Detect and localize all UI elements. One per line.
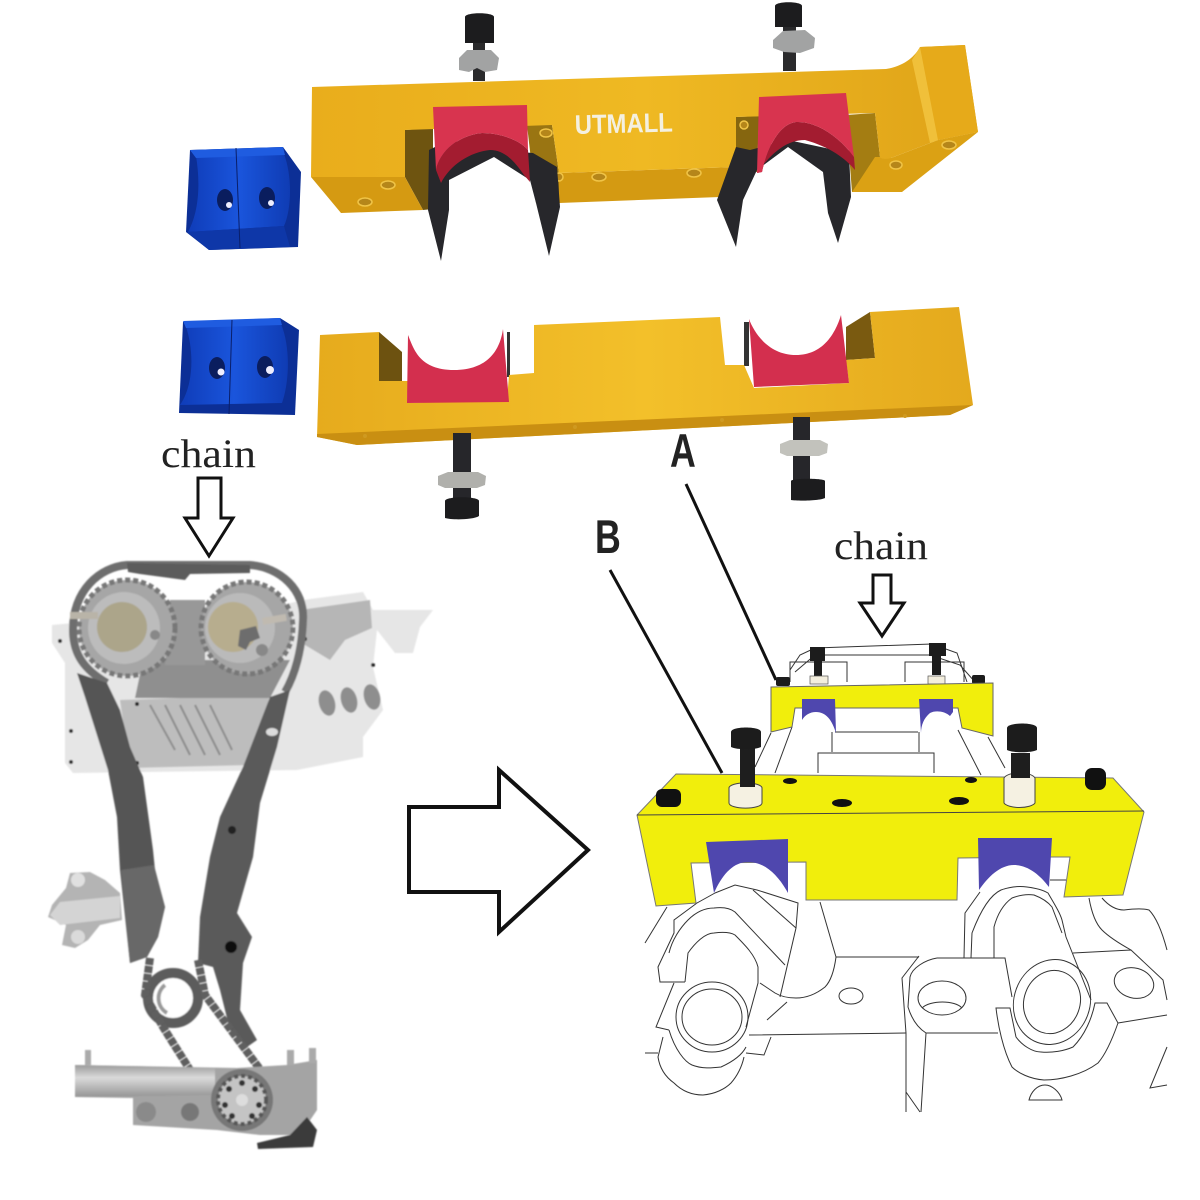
diagram: tool fitted on engine [637, 643, 1167, 1112]
bar back walls [379, 332, 402, 381]
bolt left [729, 728, 762, 808]
arrow: chain right down [860, 575, 904, 636]
sprocket left [70, 580, 175, 676]
red pads [436, 133, 530, 183]
holes [358, 121, 956, 206]
bolt left [459, 13, 499, 81]
bar lower faces [311, 177, 423, 213]
tensioner [48, 872, 122, 948]
rear bolts [776, 643, 985, 686]
bar main face [311, 45, 978, 177]
bolt left [438, 433, 486, 519]
lug side [920, 45, 978, 140]
black fingers [428, 140, 851, 261]
tool photo: assembled top bar [311, 2, 978, 261]
red pads [407, 329, 509, 403]
blue block top [186, 147, 301, 250]
label: chain left: chain [161, 431, 256, 476]
leader line B [610, 570, 722, 773]
oil pump [75, 1060, 317, 1135]
rear purple pads [802, 699, 836, 733]
bolt right [780, 417, 828, 501]
holes [363, 414, 907, 438]
label: A: A [670, 424, 696, 477]
logo: UTMALL [574, 107, 673, 140]
leader line A [686, 484, 776, 680]
lower chain [145, 958, 262, 1097]
bolt right [1004, 724, 1037, 808]
engine line art [645, 644, 1167, 1112]
crank sprocket [148, 973, 198, 1023]
label: chain right: chain [834, 523, 928, 568]
engine photo: timing chain [48, 563, 433, 1149]
arrow: chain left down [185, 478, 233, 556]
label: B: B [595, 510, 621, 563]
rear yellow bar [771, 683, 993, 736]
bar body [317, 307, 973, 445]
engine block [52, 592, 433, 773]
bar slot backs [405, 128, 433, 210]
guide right [198, 690, 290, 1047]
guide left [77, 673, 165, 963]
sprocket right [201, 582, 293, 674]
front purple pads [706, 839, 788, 893]
gear plate between sprockets [165, 600, 205, 665]
blue block lower [179, 318, 299, 415]
bolt right [773, 2, 815, 71]
arrow: large right [409, 770, 588, 932]
chain top bar [127, 563, 250, 580]
tool photo: lower bar [317, 307, 973, 519]
chain around sprockets [73, 565, 303, 692]
holes and caps [656, 768, 1106, 807]
front yellow bar [637, 774, 1144, 906]
